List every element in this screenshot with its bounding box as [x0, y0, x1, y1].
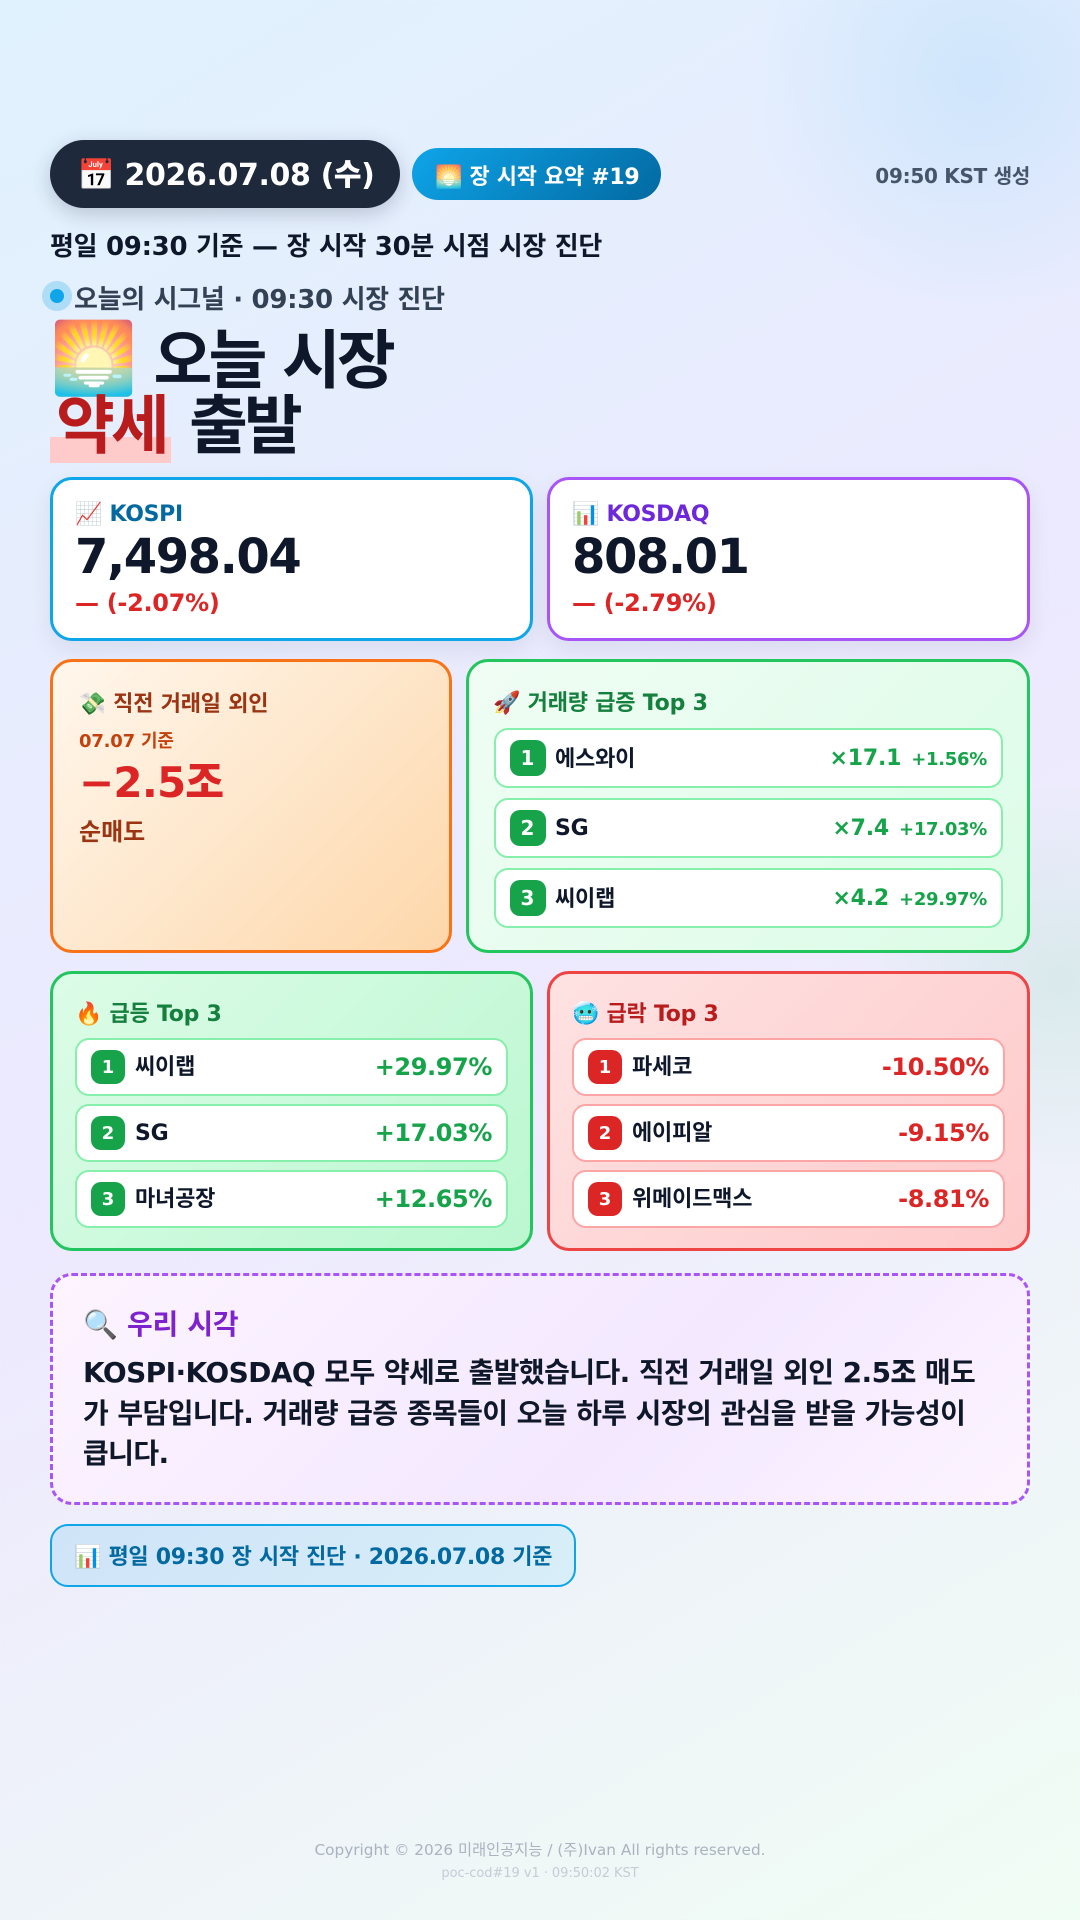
panel: our view — [50, 1273, 1030, 1505]
volume row 1: 1 — [521, 746, 534, 770]
generated time: 09:50 KST 생성 — [875, 164, 1030, 188]
view body — [83, 1356, 975, 1470]
volume heading: 🚀 거래량 급증 Top 3 — [493, 691, 708, 716]
gainers row 1: +29.97% — [375, 1053, 492, 1081]
volume row 3: 씨이랩 — [555, 887, 615, 912]
view body: 가 부담입니다. 거래량 급증 종목들이 오늘 하루 시장의 관심을 받을 가능성이 — [83, 1397, 965, 1430]
subtitle: 평일 09:30 기준 — 장 시작 30분 시점 시장 진단 — [50, 232, 602, 262]
footer — [314, 1841, 766, 1881]
losers row 1 — [572, 1038, 1005, 1096]
title line 2: 약세 출발 — [56, 390, 299, 464]
gainers row 3: +12.65% — [375, 1185, 492, 1213]
volume row 1 — [494, 728, 1002, 788]
volume row 2: 2 — [521, 816, 534, 840]
volume row 3 — [494, 868, 1002, 928]
KOSPI value: 7,498.04 — [75, 529, 300, 585]
episode tag pill — [412, 148, 661, 200]
losers row 3: 3 — [599, 1189, 611, 1210]
panel: losers top 3 — [547, 971, 1030, 1251]
KOSPI label: 📈 KOSPI — [75, 502, 183, 527]
gainers row 2: SG — [135, 1121, 169, 1146]
basis note: 📊 평일 09:30 장 시작 진단 · 2026.07.08 기준 — [74, 1545, 552, 1570]
KOSPI change: — (-2.07%) — [75, 589, 220, 617]
title line 1: 🌅 오늘 시장 — [50, 316, 392, 399]
panel: volume surge top 3 — [466, 659, 1030, 953]
gainers row 3: 마녀공장 — [135, 1187, 215, 1212]
KOSDAQ change: — (-2.79%) — [572, 589, 717, 617]
losers row 3 — [572, 1170, 1005, 1228]
foreign value: −2.5조 — [79, 758, 223, 807]
panel: foreign net selling — [50, 659, 452, 953]
foreign heading: 💸 직전 거래일 외인 — [78, 692, 268, 717]
volume row 2: ×7.4 +17.03% — [832, 816, 987, 841]
losers row 1: 1 — [599, 1057, 611, 1078]
volume row 3: ×4.2 +29.97% — [832, 886, 987, 911]
KOSDAQ card — [547, 477, 1030, 641]
KOSPI card — [50, 477, 533, 641]
foreign note: 순매도 — [79, 818, 145, 846]
foreign date: 07.07 기준 — [79, 731, 174, 752]
volume row 3: 3 — [521, 886, 534, 910]
losers heading: 🥶 급락 Top 3 — [572, 1002, 719, 1027]
view heading: 🔍 우리 시각 — [83, 1308, 238, 1341]
KOSDAQ value: 808.01 — [572, 529, 749, 585]
gainers row 1 — [75, 1038, 508, 1096]
volume row 2: SG — [555, 816, 589, 841]
gainers row 1: 1 — [102, 1057, 114, 1078]
gainers heading: 🔥 급등 Top 3 — [75, 1002, 222, 1027]
highlight bar — [50, 437, 171, 463]
gainers row 1: 씨이랩 — [135, 1055, 195, 1080]
signal label: 오늘의 시그널 · 09:30 시장 진단 — [74, 285, 445, 315]
date pill: 📅 2026.07.08 (수) — [78, 158, 374, 193]
losers row 2: 2 — [599, 1123, 611, 1144]
gainers row 3 — [75, 1170, 508, 1228]
volume row 1: ×17.1 +1.56% — [830, 746, 987, 771]
volume row 2 — [494, 798, 1002, 858]
gainers row 3: 3 — [102, 1189, 114, 1210]
losers row 3: 위메이드맥스 — [632, 1187, 752, 1212]
view body: 큽니다. — [83, 1437, 169, 1470]
KOSDAQ label: 📊 KOSDAQ — [572, 502, 709, 527]
hero title — [50, 316, 394, 464]
episode tag pill: 🌅 장 시작 요약 #19 — [435, 165, 639, 190]
losers row 1: 파세코 — [632, 1055, 692, 1080]
losers row 2: 에이피알 — [632, 1121, 712, 1146]
signal dot — [50, 289, 64, 303]
basis note — [50, 1524, 576, 1587]
losers row 2 — [572, 1104, 1005, 1162]
volume row 1: 에스와이 — [555, 747, 635, 772]
losers row 2: -9.15% — [898, 1119, 989, 1147]
date pill — [50, 140, 400, 208]
background glow: mid right — [860, 780, 1080, 1180]
build stamp: poc-cod#19 v1 · 09:50:02 KST — [441, 1866, 639, 1881]
gainers row 2 — [75, 1104, 508, 1162]
view body: KOSPI·KOSDAQ 모두 약세로 출발했습니다. 직전 거래일 외인 2.5조 매도 — [83, 1356, 975, 1389]
background glow: top right — [740, 0, 1080, 320]
gainers row 2: +17.03% — [375, 1119, 492, 1147]
panel: gainers top 3 — [50, 971, 533, 1251]
losers row 3: -8.81% — [898, 1185, 989, 1213]
losers row 1: -10.50% — [882, 1053, 989, 1081]
copyright: Copyright © 2026 미래인공지능 / (주)Ivan All rights reserved. — [314, 1841, 766, 1859]
gainers row 2: 2 — [102, 1123, 114, 1144]
